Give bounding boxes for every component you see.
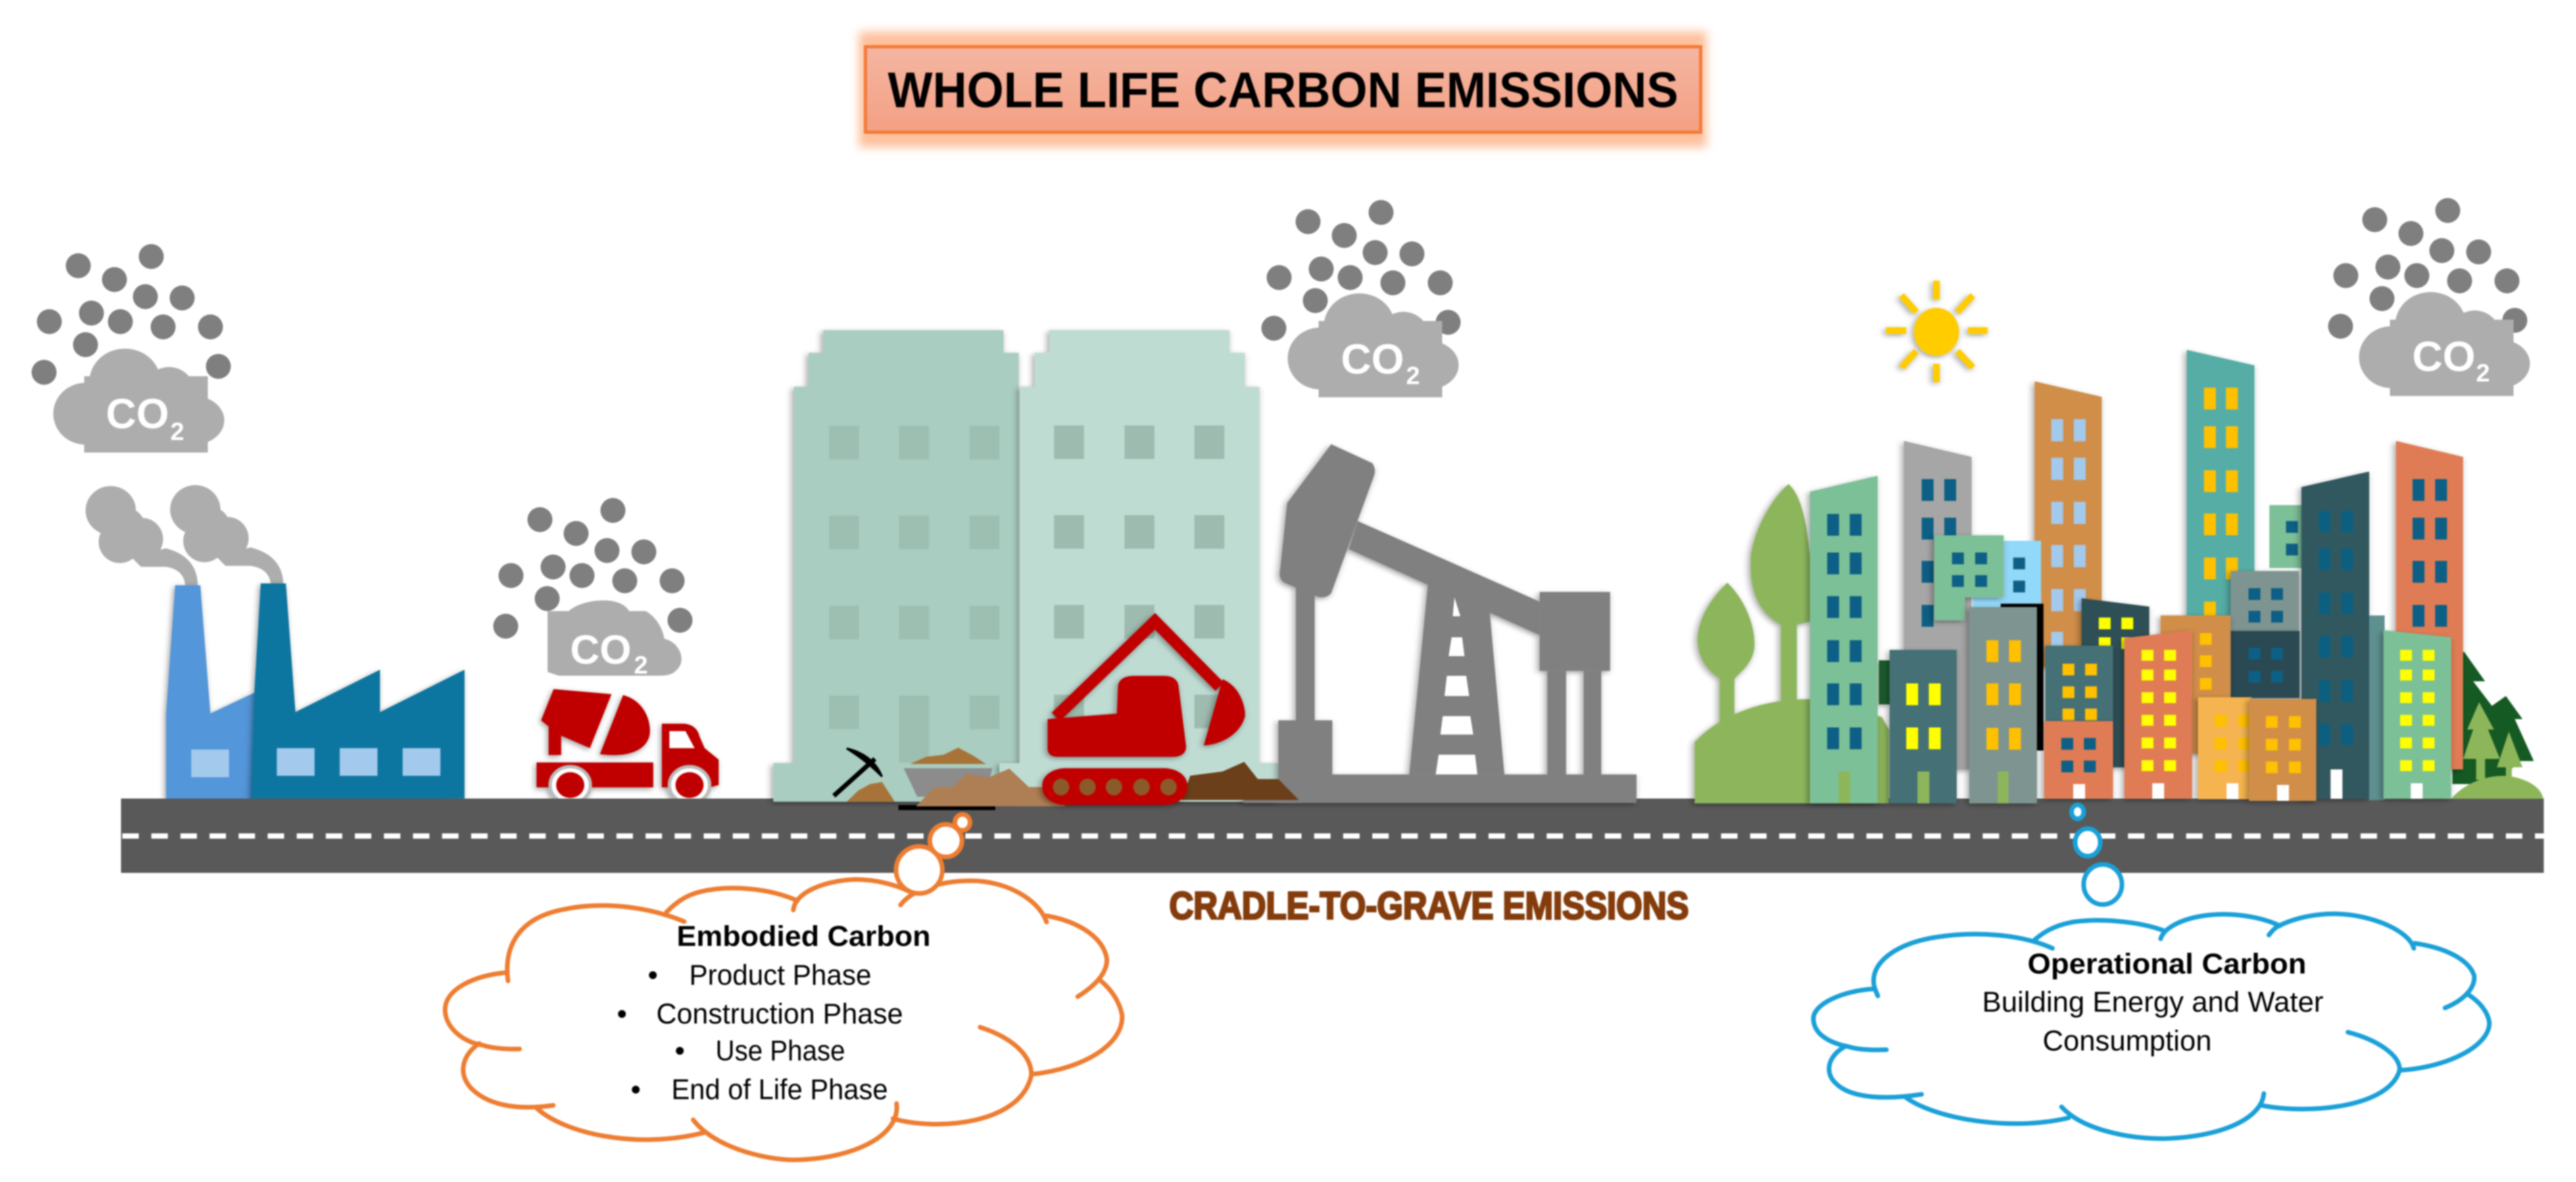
callout: embodied carbon thought cloud: Embodied Carbon: [677, 920, 931, 952]
icon: CO2 cloud above factory: [32, 244, 231, 453]
callout: operational carbon thought cloud: Consumption: [2043, 1025, 2212, 1057]
callout: embodied carbon thought cloud: Use Phase: [716, 1035, 845, 1067]
icon: CO2 cloud above truck: [493, 498, 693, 679]
icon: CO2 cloud above oil pump: 2: [1406, 362, 1420, 390]
callout: embodied carbon thought cloud: •: [675, 1035, 685, 1067]
front row: coral low block: [2044, 721, 2113, 799]
icon: CO2 cloud above factory: CO: [106, 390, 169, 437]
front row: yellow-orange block: [2198, 697, 2252, 799]
label: cradle-to-grave emissions: CRADLE-TO-GRAVE EMISSIONS: [1169, 885, 1689, 927]
icon: oil pump jack: [1243, 444, 1636, 803]
callout: embodied carbon thought cloud: [445, 814, 1122, 1160]
icon: factory with smoke: [85, 485, 464, 799]
front row: small slate block: [2045, 646, 2113, 721]
icon: red excavator: [1042, 622, 1245, 805]
callout: operational carbon thought cloud: Operational Carbon: [2028, 948, 2306, 980]
callout: embodied carbon thought cloud: •: [648, 959, 658, 991]
icon: cement mixer truck: [537, 689, 719, 804]
front row: slate block: [1889, 650, 1956, 803]
callout: embodied carbon thought cloud: End of Life Phase: [671, 1073, 888, 1106]
front row: grey-green block: [1969, 607, 2037, 803]
callout: embodied carbon thought cloud: Construction Phase: [656, 998, 903, 1030]
icon: CO2 cloud above city: [2328, 198, 2530, 396]
icon: city skyline with trees: [1695, 350, 2543, 803]
back row towers: [1904, 441, 1972, 770]
icon: CO2 cloud above truck: 2: [634, 652, 648, 679]
front row: coral mid block: [2124, 630, 2192, 799]
icon: CO2 cloud above oil pump: [1261, 200, 1461, 397]
far right pine trees: [2451, 652, 2543, 799]
icon: CO2 cloud above factory: 2: [170, 418, 184, 446]
icon: sun: [1886, 281, 1987, 382]
front row: orange block: [2249, 699, 2316, 801]
road: [121, 799, 2544, 873]
callout: embodied carbon thought cloud: Product Phase: [689, 959, 871, 991]
callout: embodied carbon thought cloud: •: [617, 998, 627, 1030]
front row: right green block: [2383, 630, 2451, 799]
icon: CO2 cloud above city: 2: [2476, 360, 2490, 387]
callout: operational carbon thought cloud: Building Energy and Water: [1982, 986, 2323, 1018]
front row: green tower: [1810, 476, 1878, 803]
title: WHOLE LIFE CARBON EMISSIONS: [888, 62, 1678, 118]
icon: CO2 cloud above truck: CO: [570, 628, 631, 673]
icon: two green apartment towers: [773, 330, 1278, 802]
callout: operational carbon thought cloud: [1813, 805, 2489, 1139]
callout: embodied carbon thought cloud: •: [631, 1073, 641, 1106]
title: [859, 32, 1707, 147]
trees and hills: [1695, 484, 1891, 803]
icon: CO2 cloud above oil pump: CO: [1341, 335, 1404, 383]
icon: CO2 cloud above city: CO: [2412, 333, 2475, 380]
icon: mining pick, barrow and soil piles: [834, 748, 1299, 810]
